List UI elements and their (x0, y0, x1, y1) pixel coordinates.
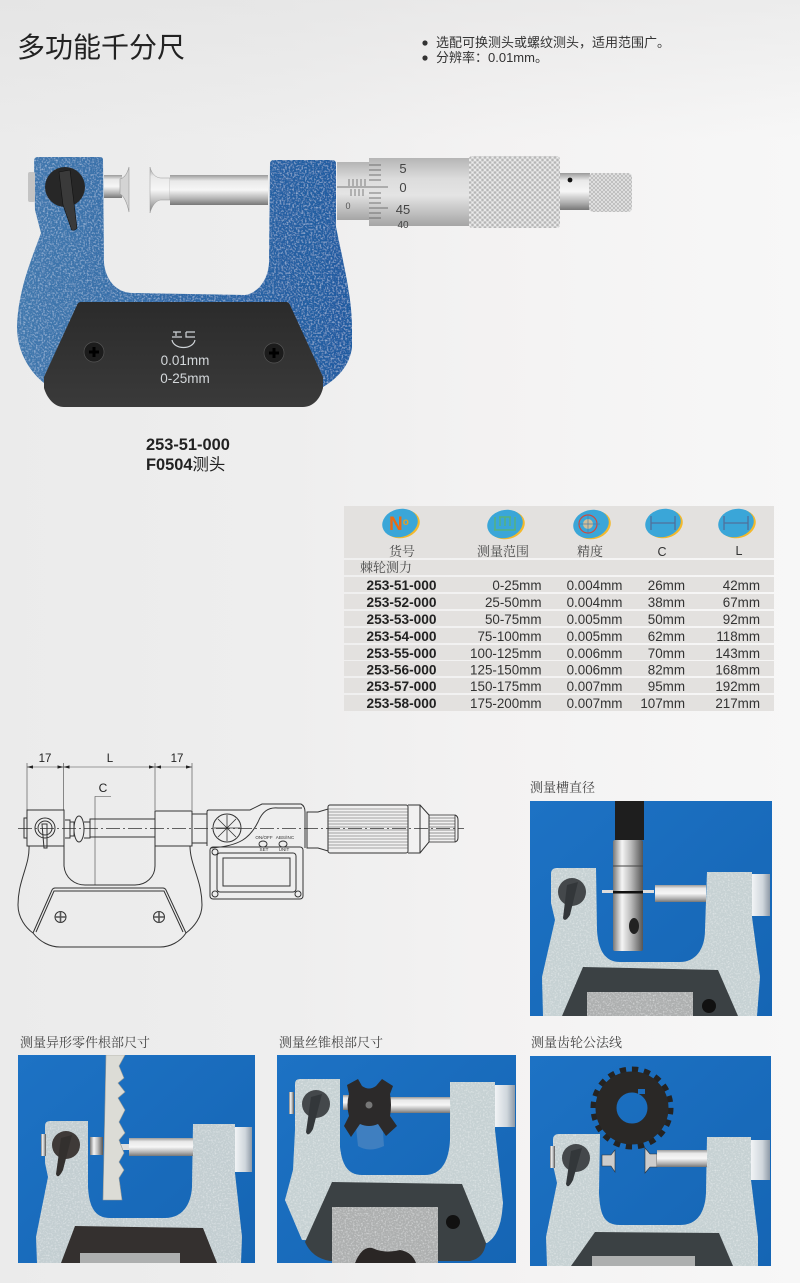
row 253-58-000 (344, 695, 774, 711)
icon: C (642, 505, 686, 542)
lock knob (52, 1131, 80, 1176)
product code caption: 253-51-000 (146, 436, 230, 454)
column labels: L (736, 544, 743, 558)
micrometer frame (36, 1121, 242, 1263)
row 253-54-000 (344, 628, 774, 644)
thimble: 40 (397, 220, 409, 231)
row 253-52-000: 67mm (723, 595, 760, 610)
row 253-58-000: 253-58-000 (366, 696, 437, 711)
drawing button labels: ON/OFF (255, 835, 273, 840)
column labels (389, 544, 743, 559)
micrometer frame (546, 1134, 758, 1266)
row 253-55-000: 70mm (648, 646, 685, 661)
row 253-57-000: 0.007mm (567, 679, 622, 694)
row 253-58-000: 107mm (640, 696, 685, 711)
brand logo (172, 332, 195, 348)
icon: number: N (389, 514, 403, 535)
row 253-53-000: 253-53-000 (366, 612, 437, 627)
spindle and sleeve (41, 1127, 252, 1172)
plate screws (84, 342, 284, 363)
ratchet (560, 173, 632, 212)
plate text (160, 353, 210, 386)
feature bullet list: 分辨率：0.01mm。 (436, 50, 548, 65)
dimension lines: 17 (39, 753, 51, 765)
product code caption: F0504测头 (146, 456, 225, 474)
black plate (44, 302, 323, 407)
drawing thimble (307, 805, 458, 853)
row 253-55-000: 0.006mm (567, 646, 622, 661)
lock knob (558, 878, 586, 920)
row 253-56-000: 125-150mm (470, 662, 542, 678)
row 253-55-000: 143mm (715, 646, 760, 661)
row 253-58-000: 175-200mm (470, 696, 542, 711)
row 253-54-000: 118mm (716, 629, 760, 644)
micrometer frame (542, 868, 760, 1016)
icon: L (715, 505, 759, 542)
gear (595, 1071, 669, 1145)
tap workpiece (344, 1079, 397, 1150)
row 253-56-000: 0.006mm (567, 662, 622, 678)
group row (344, 560, 774, 575)
row 253-57-000: 95mm (648, 679, 685, 694)
column labels: 货号 (389, 544, 415, 559)
drawing button labels: UNIT (279, 847, 290, 852)
spindle and sleeve (550, 1140, 770, 1180)
toothed workpiece (103, 1055, 125, 1200)
caption: tap root: 测量丝锥根部尺寸 (279, 1035, 383, 1050)
drawing frame (18, 810, 202, 947)
dimension lines: 17 (171, 753, 183, 765)
spindle and anvil (104, 167, 268, 213)
lock knob (302, 1090, 330, 1134)
row 253-53-000: 50mm (648, 612, 685, 627)
drawing button labels: ABS/INC (276, 835, 295, 840)
row 253-54-000: 253-54-000 (366, 629, 437, 644)
dimension lines: L (107, 753, 114, 765)
photo: measuring tap root (277, 1055, 516, 1263)
dimension lines (27, 753, 192, 885)
row 253-57-000: 253-57-000 (366, 679, 437, 694)
row 253-52-000: 38mm (648, 595, 685, 610)
row 253-56-000: 253-56-000 (366, 662, 437, 678)
lock knob (45, 167, 85, 230)
icon: range (484, 506, 528, 543)
plate and block (571, 1232, 733, 1266)
title: 多功能千分尺 (17, 32, 185, 63)
sleeve (337, 162, 370, 220)
icon: number (379, 505, 423, 542)
icon: precision (570, 506, 614, 543)
row 253-56-000: 82mm (648, 662, 685, 678)
row 253-52-000 (344, 594, 774, 610)
table header (344, 505, 774, 559)
drawing anvil and spindle (65, 816, 155, 842)
row 253-51-000: 42mm (723, 578, 760, 593)
lock knob (562, 1144, 590, 1186)
row 253-51-000: 253-51-000 (366, 578, 437, 593)
caption: groove diameter: 测量槽直径 (530, 780, 595, 795)
drawing button labels (255, 835, 295, 852)
row 253-58-000: 217mm (715, 696, 760, 711)
row 253-51-000 (344, 577, 774, 593)
blue frame (17, 157, 352, 387)
row 253-54-000: 75-100mm (477, 629, 542, 644)
technical drawing (18, 753, 464, 947)
row 253-55-000: 100-125mm (470, 646, 542, 661)
row 253-51-000: 0.004mm (567, 578, 622, 593)
column labels: C (657, 545, 667, 559)
row 253-54-000: 0.005mm (567, 629, 622, 644)
row 253-53-000: 0.005mm (567, 612, 622, 627)
row 253-57-000: 192mm (715, 679, 760, 694)
row 253-51-000: 26mm (648, 578, 685, 593)
workpiece cylinder (613, 801, 644, 951)
product photo: micrometer (17, 156, 632, 407)
row 253-53-000 (344, 611, 774, 627)
column labels: 精度 (577, 544, 603, 559)
feature bullet list (422, 35, 670, 65)
row 253-52-000: 253-52-000 (366, 595, 437, 610)
row 253-52-000: 0.004mm (567, 595, 622, 610)
spindle and sleeve (289, 1085, 515, 1127)
frame left end cap (28, 172, 35, 202)
plate and block (562, 967, 738, 1016)
plate and block (61, 1226, 217, 1263)
row 253-54-000: 62mm (648, 629, 685, 644)
row 253-57-000 (344, 678, 774, 694)
row 253-53-000: 50-75mm (485, 612, 542, 627)
caption: irregular part: 测量异形零件根部尺寸 (20, 1035, 150, 1050)
dimension lines: C (99, 781, 108, 795)
icon: number: o (403, 517, 409, 528)
row 253-52-000: 25-50mm (485, 595, 542, 610)
drawing digital counter (192, 804, 305, 899)
thimble: 0 (399, 180, 407, 195)
knurled grip (469, 156, 560, 228)
thimble (369, 158, 470, 231)
feature bullet list: 选配可换测头或螺纹测头，适用范围广。 (436, 35, 670, 50)
photo: measuring groove diameter (530, 801, 772, 1016)
row 253-53-000: 92mm (723, 612, 760, 627)
row 253-51-000: 0-25mm (492, 578, 542, 593)
photo: measuring irregular part root (18, 1055, 255, 1263)
group row: 棘轮测力 (360, 560, 412, 575)
drawing button labels: SET (260, 847, 269, 852)
row 253-58-000: 0.007mm (567, 696, 622, 711)
sleeve: 0 (345, 201, 351, 211)
row 253-56-000: 168mm (715, 662, 760, 678)
spindle and sleeve (602, 874, 770, 916)
specification table (344, 505, 774, 711)
row 253-55-000 (344, 645, 774, 661)
thimble: 45 (396, 202, 410, 217)
photo: measuring gear (530, 1056, 771, 1266)
product code caption (146, 436, 230, 474)
column labels: 测量范围 (477, 544, 529, 559)
plate and block (305, 1182, 486, 1263)
micrometer frame (285, 1079, 503, 1243)
centerline (18, 828, 464, 830)
plate text: 0-25mm (160, 371, 210, 386)
plate text: 0.01mm (161, 353, 209, 368)
row 253-55-000: 253-55-000 (366, 646, 437, 661)
caption: gear: 测量齿轮公法线 (531, 1035, 622, 1050)
thimble: 5 (399, 161, 407, 176)
row 253-56-000 (344, 661, 774, 678)
row 253-57-000: 150-175mm (470, 679, 542, 694)
